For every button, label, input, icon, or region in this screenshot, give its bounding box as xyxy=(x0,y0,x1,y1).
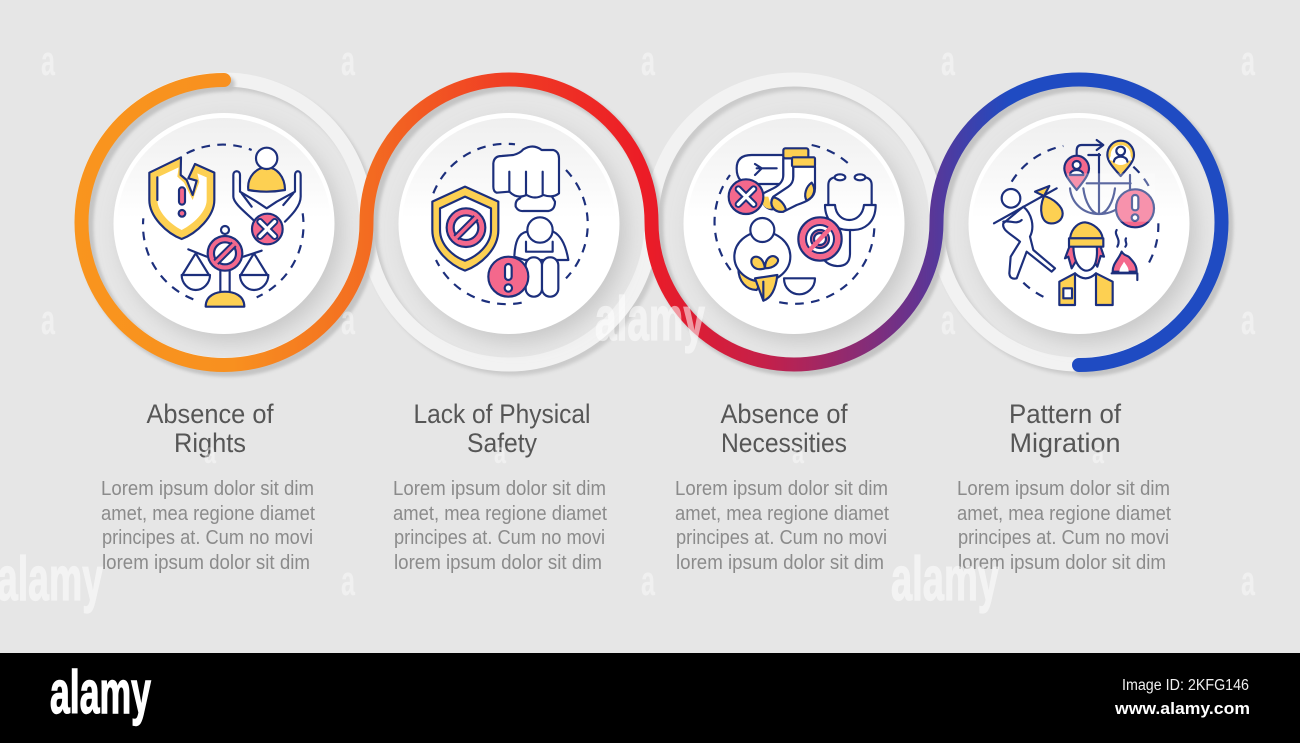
white icon discs xyxy=(114,113,1196,342)
watermarks: a xyxy=(941,37,955,84)
step 4 text: amet, mea regione diamet xyxy=(957,503,1171,525)
icon: absence of necessities xyxy=(715,145,876,304)
step 3 heading: Necessities xyxy=(721,428,847,458)
watermarks: a xyxy=(1241,557,1255,604)
footer logo: alamy xyxy=(50,659,151,726)
step 2 text: amet, mea regione diamet xyxy=(393,503,607,525)
step 3 text: amet, mea regione diamet xyxy=(675,503,889,525)
watermarks xyxy=(0,37,1255,614)
watermarks: a xyxy=(941,296,955,343)
icon: lack of physical safety xyxy=(432,144,588,304)
step 2 heading: Lack of Physical xyxy=(414,399,590,429)
watermarks: a xyxy=(341,37,355,84)
icon: pattern of migration xyxy=(994,140,1158,305)
watermarks: a xyxy=(641,557,655,604)
watermarks: a xyxy=(1241,296,1255,343)
step 3 text: principes at. Cum no movi xyxy=(676,527,887,549)
step 1 text: amet, mea regione diamet xyxy=(101,503,315,525)
gradient flow line xyxy=(82,80,1226,369)
watermarks: a xyxy=(792,437,804,470)
step 2 heading: Safety xyxy=(467,428,537,458)
step 1 heading: Absence of xyxy=(146,399,274,429)
watermarks: a xyxy=(341,557,355,604)
step 4 heading: Migration xyxy=(1010,428,1120,458)
watermarks: alamy xyxy=(0,545,103,614)
step 4 heading: Pattern of xyxy=(1009,399,1121,429)
watermarks: a xyxy=(494,437,506,470)
step 2 text: principes at. Cum no movi xyxy=(394,527,605,549)
step 4 text: Lorem ipsum dolor sit dim xyxy=(957,478,1170,500)
step 1 text: Lorem ipsum dolor sit dim xyxy=(101,478,314,500)
icon: absence of rights xyxy=(143,145,304,307)
step 1 text: lorem ipsum dolor sit dim xyxy=(102,552,310,574)
watermarks: alamy xyxy=(891,545,999,614)
watermarks: a xyxy=(204,437,216,470)
step 2 text: lorem ipsum dolor sit dim xyxy=(394,552,602,574)
step 1 heading: Rights xyxy=(174,428,246,458)
watermarks: a xyxy=(1241,37,1255,84)
site url: www.alamy.com xyxy=(1114,699,1250,718)
step 4 text: lorem ipsum dolor sit dim xyxy=(958,552,1166,574)
watermarks: a xyxy=(1092,437,1104,470)
watermarks: a xyxy=(341,296,355,343)
watermarks: a xyxy=(641,37,655,84)
step 3 heading: Absence of xyxy=(720,399,848,429)
step 3 text: Lorem ipsum dolor sit dim xyxy=(675,478,888,500)
step 4 text: principes at. Cum no movi xyxy=(958,527,1169,549)
step 2 text: Lorem ipsum dolor sit dim xyxy=(393,478,606,500)
watermarks: a xyxy=(41,296,55,343)
image id: Image ID: 2KFG146 xyxy=(1122,677,1249,694)
watermarks: a xyxy=(41,37,55,84)
pale base rings xyxy=(82,80,1226,368)
footer bar xyxy=(0,653,1300,743)
watermarks: alamy xyxy=(595,285,705,354)
step 3 text: lorem ipsum dolor sit dim xyxy=(676,552,884,574)
step 1 text: principes at. Cum no movi xyxy=(102,527,313,549)
